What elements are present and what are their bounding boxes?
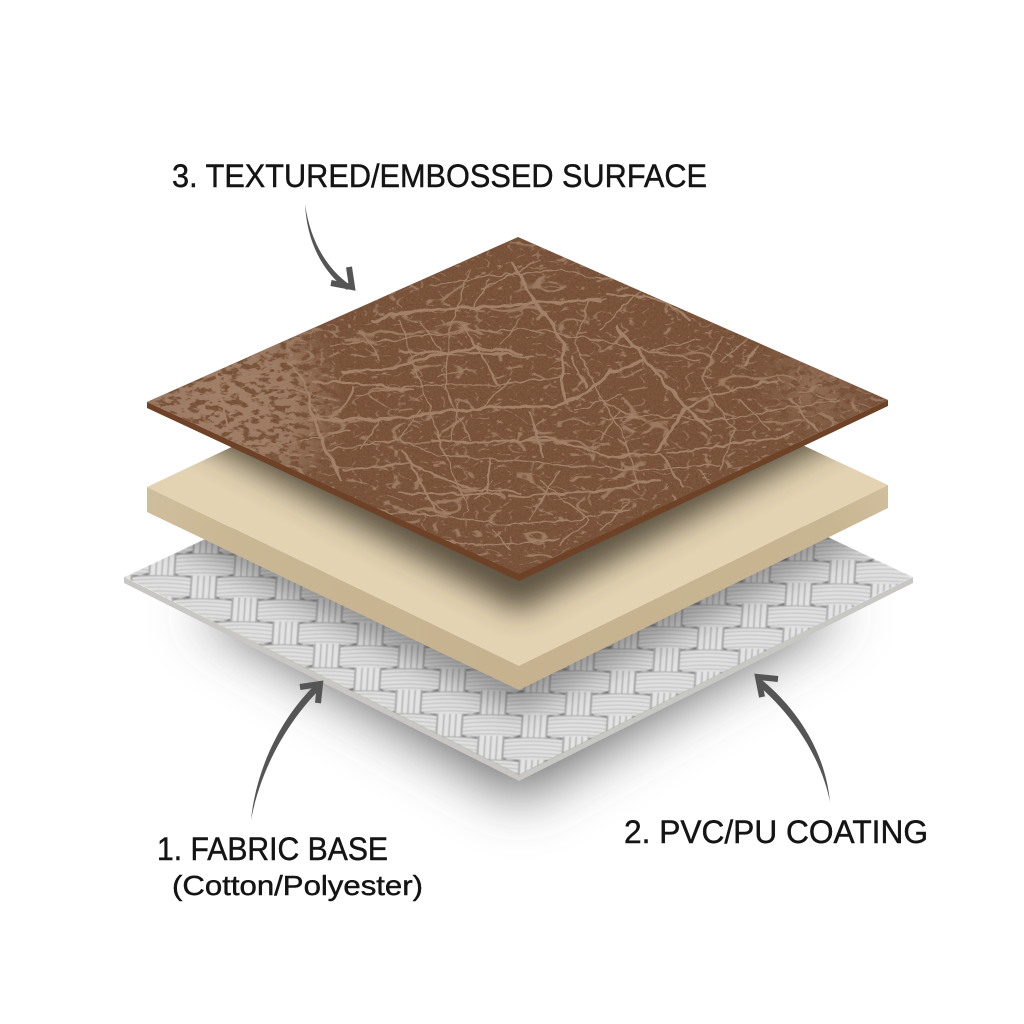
layer 3: textured leather surface (147, 237, 888, 581)
label 1: fabric base: 1. FABRIC BASE (157, 831, 388, 867)
shadow of leather on coating (197, 442, 840, 629)
leather top (147, 237, 888, 574)
label 2: coating: 2. PVC/PU COATING (624, 814, 928, 850)
layer 1: fabric base (124, 526, 913, 781)
arrow to textured surface (305, 204, 352, 290)
fabric edge (124, 577, 913, 781)
arrow to coating (758, 677, 830, 802)
coating left side (147, 487, 519, 690)
coating right side (519, 485, 888, 690)
shadow of coating on fabric (170, 526, 867, 724)
label 1: fabric base: (Cotton/Polyester) (172, 870, 423, 901)
coating top (147, 312, 888, 666)
arrow to fabric base (251, 683, 321, 820)
leather texture (147, 237, 888, 574)
label 1: fabric base (157, 831, 423, 901)
layer 2: PVC/PU coating (147, 442, 888, 690)
fabric weave surface (124, 529, 912, 774)
leather edge (147, 400, 888, 581)
drop shadow under fabric (195, 510, 845, 800)
label 3: textured surface: 3. TEXTURED/EMBOSSED SURFACE (172, 158, 707, 194)
